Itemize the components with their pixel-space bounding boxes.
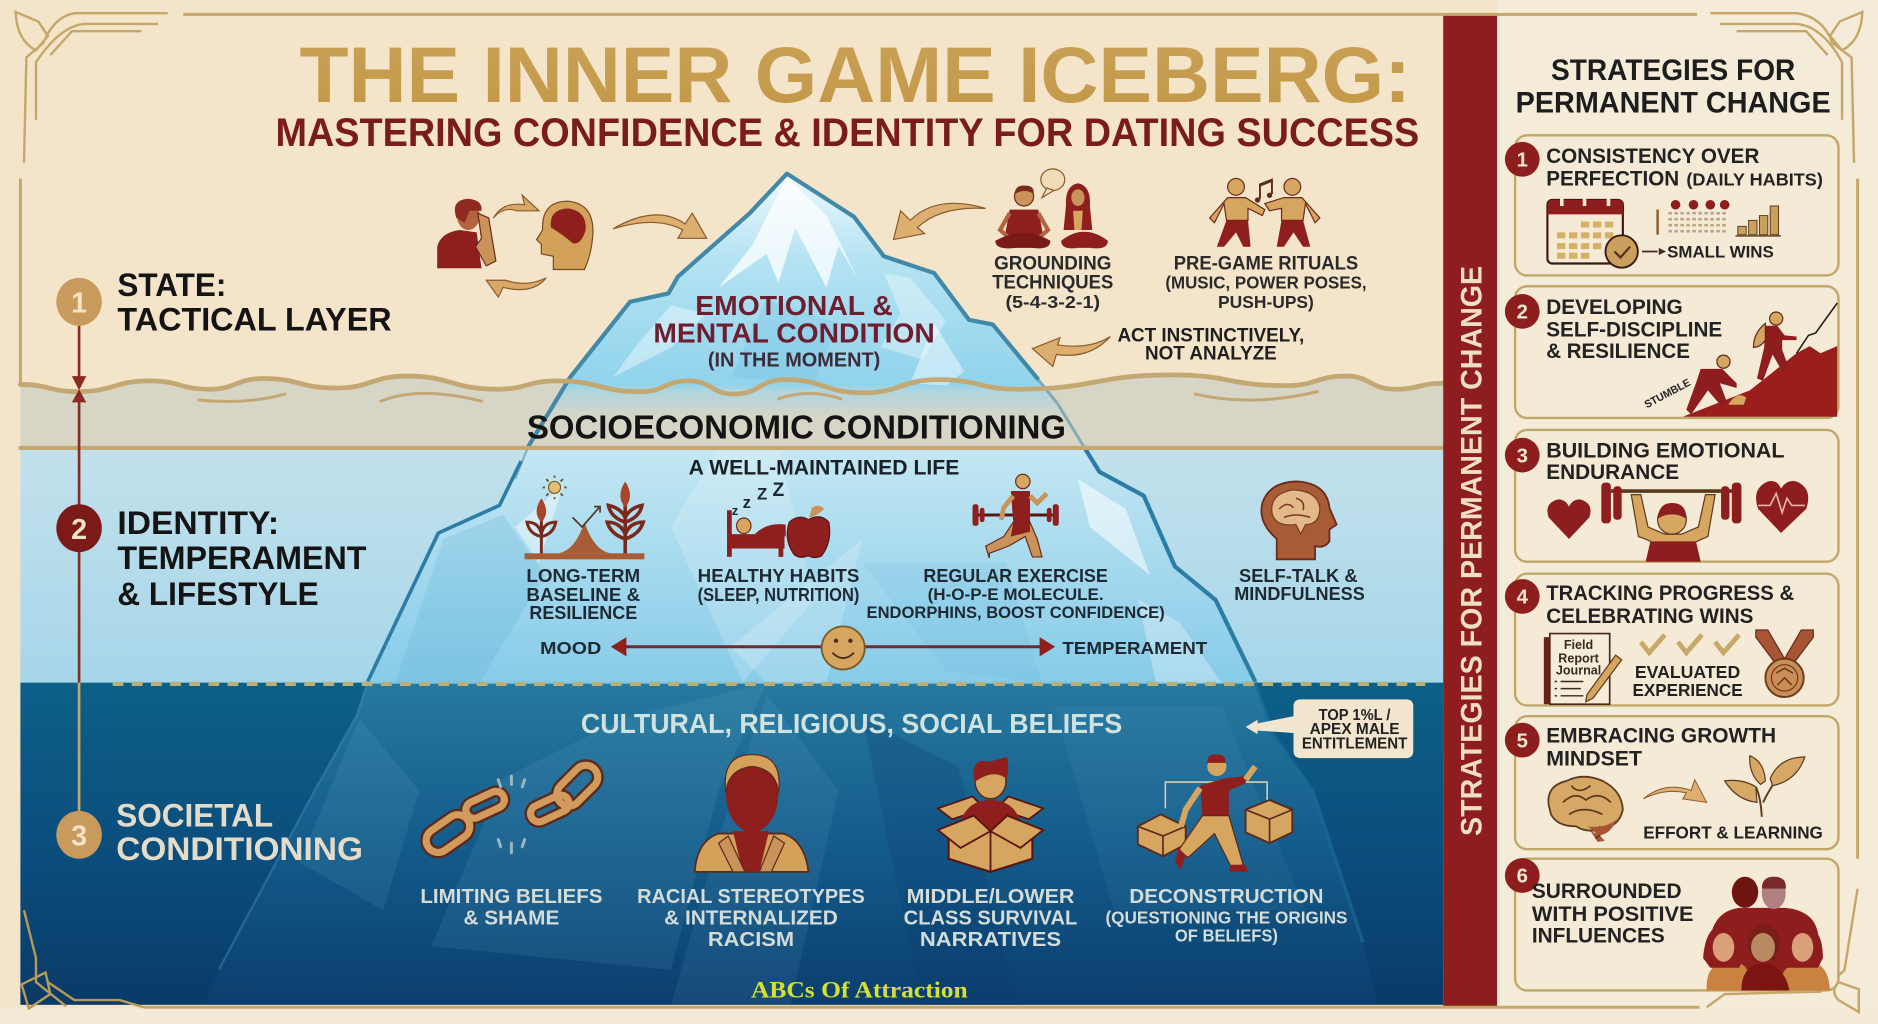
panel: card 1 consistency: [1505, 135, 1838, 275]
heading: socioeconomic conditioning: SOCIOECONOMIC CONDITIONING: [527, 409, 1066, 446]
act instinctively label: [1117, 325, 1304, 364]
mood-temperament spectrum: TEMPERAMENT: [1062, 638, 1207, 658]
arrow: loop to iceberg: [613, 213, 707, 238]
panel: card 3 emotional endurance: [1505, 430, 1838, 562]
layer 1: state: [56, 267, 392, 338]
healthy habits label: HEALTHY HABITS: [698, 565, 859, 586]
layer 3: societal conditioning: SOCIETAL: [116, 797, 273, 833]
panel: card 4 tracking progress: [1505, 574, 1838, 705]
arrow: grounding to iceberg: [893, 203, 986, 240]
layer 1: state: TACTICAL LAYER: [117, 302, 392, 338]
panel: card 4 tracking progress: 4: [1517, 587, 1529, 609]
icon: long-term baseline: [525, 475, 644, 559]
panel: card 1 consistency: SMALL WINS: [1667, 242, 1774, 261]
regular exercise label: ENDORPHINS, BOOST CONFIDENCE): [867, 603, 1165, 622]
panel: card 3 emotional endurance: BUILDING EMOTIONAL: [1546, 438, 1785, 463]
strategies side bar: [1443, 16, 1497, 1006]
icon: field report journal: Report: [1558, 651, 1600, 665]
panel: card 5 growth mindset: MINDSET: [1546, 745, 1642, 770]
racial stereotypes label: RACISM: [708, 929, 794, 951]
panel: card 2 self-discipline: [1505, 286, 1838, 418]
icon: racial stereotypes: [695, 755, 808, 872]
strategies side bar: STRATEGIES FOR PERMANENT CHANGE: [1456, 266, 1489, 836]
layer 2: identity: 2: [71, 514, 87, 546]
icon: grounding techniques: [995, 169, 1108, 248]
icon: climbers on mountain: STUMBLE: [1643, 377, 1693, 411]
heading: strategies: [1516, 54, 1831, 120]
pre-game label: PUSH-UPS): [1218, 292, 1314, 312]
limiting beliefs label: LIMITING BELIEFS: [420, 886, 602, 908]
middle/lower class label: CLASS SURVIVAL: [904, 908, 1077, 930]
callout: apex male entitlement: ENTITLEMENT: [1302, 736, 1408, 753]
icon: medal: [1756, 630, 1813, 697]
icon: calendar: [1547, 195, 1638, 268]
iceberg: [204, 168, 1401, 1005]
long-term label: LONG-TERM: [526, 565, 640, 586]
icon: self-talk head: [1261, 481, 1337, 559]
layer 3: societal conditioning: CONDITIONING: [116, 831, 363, 867]
regular exercise label: REGULAR EXERCISE: [923, 565, 1108, 586]
icon: pre-game rituals: [1210, 178, 1320, 247]
layer axis line: [72, 326, 86, 814]
icon: climbers on mountain: [1643, 303, 1837, 417]
grounding label: [992, 253, 1113, 312]
pre-game label: [1165, 253, 1367, 312]
deconstruction label: DECONSTRUCTION: [1129, 886, 1323, 908]
act instinctively label: ACT INSTINCTIVELY,: [1117, 325, 1304, 346]
act instinctively label: NOT ANALYZE: [1145, 343, 1277, 364]
mood-temperament spectrum: [540, 626, 1207, 669]
panel: card 2 self-discipline: 2: [1517, 302, 1528, 324]
title: MASTERING CONFIDENCE & IDENTITY FOR DATING SUCCESS: [275, 111, 1419, 155]
healthy habits label: (SLEEP, NUTRITION): [698, 584, 859, 605]
racial stereotypes label: RACIAL STEREOTYPES: [637, 886, 865, 908]
icon: healthy habits: [729, 480, 830, 558]
racial stereotypes label: [637, 886, 865, 951]
heading: strategies: STRATEGIES FOR: [1551, 54, 1795, 87]
iceberg tip text: [653, 290, 935, 371]
iceberg tip text: MENTAL CONDITION: [653, 318, 935, 349]
heading: cultural beliefs: CULTURAL, RELIGIOUS, SOCIAL BELIEFS: [581, 708, 1122, 739]
icon: healthy habits: Z: [757, 484, 767, 503]
mood-temperament spectrum: MOOD: [540, 638, 601, 658]
panel: card 4 tracking progress: EVALUATED: [1635, 662, 1740, 682]
icon: group of people: [1703, 877, 1830, 990]
panel: card 6 positive influences: INFLUENCES: [1532, 923, 1665, 948]
icon: weightlifter: [1601, 483, 1741, 562]
panel: water layers: [20, 375, 1443, 1005]
layer 2: identity: TEMPERAMENT: [117, 540, 367, 576]
panel: card 1 consistency: PERFECTION: [1546, 166, 1679, 191]
panel: card 2 self-discipline: DEVELOPING: [1546, 294, 1683, 319]
panel: card 4 tracking progress: CELEBRATING WINS: [1546, 603, 1753, 628]
snow facets: [719, 177, 858, 287]
icon: deconstruction: [1138, 754, 1292, 872]
panel: card 5 growth mindset: EFFORT & LEARNING: [1643, 822, 1823, 842]
middle/lower class label: [904, 886, 1077, 951]
iceberg tip text: (IN THE MOMENT): [708, 349, 880, 371]
panel: card 5 growth mindset: EMBRACING GROWTH: [1546, 723, 1776, 748]
layer 1: state: STATE:: [117, 267, 226, 303]
icon: healthy habits: Z: [773, 480, 785, 501]
deep facets: [431, 683, 767, 970]
icon: regular exercise: [973, 474, 1059, 558]
healthy habits label: [698, 565, 859, 605]
layer 1: state: 1: [71, 288, 87, 320]
self-talk label: [1234, 565, 1365, 604]
layer 2: identity: [56, 504, 367, 612]
long-term label: [526, 565, 640, 623]
iceberg tip text: EMOTIONAL &: [695, 290, 893, 321]
mid facets: [671, 448, 814, 683]
icon: person in box: [938, 757, 1043, 872]
middle/lower class label: NARRATIVES: [920, 929, 1061, 951]
icon: healthy habits: z: [732, 503, 739, 518]
panel: card 5 growth mindset: 5: [1517, 730, 1528, 752]
regular exercise label: (H-O-P-E MOLECULE.: [928, 585, 1104, 604]
panel: card 3 emotional endurance: ENDURANCE: [1546, 459, 1679, 484]
icon: brain: [1548, 777, 1623, 842]
panel: card 6 positive influences: WITH POSITIVE: [1532, 901, 1694, 926]
pre-game label: PRE-GAME RITUALS: [1174, 253, 1358, 274]
icon: field report journal: Journal: [1556, 663, 1601, 677]
layer 2: identity: IDENTITY:: [117, 505, 279, 541]
icon: broken chain: [421, 760, 603, 857]
icon: healthy habits: z: [743, 493, 751, 512]
grounding label: GROUNDING: [994, 253, 1111, 274]
layer 3: societal conditioning: 3: [71, 821, 87, 853]
deconstruction label: OF BELIEFS): [1175, 925, 1278, 945]
long-term label: BASELINE &: [526, 584, 640, 605]
watermark: ABCs Of Attraction: [751, 978, 968, 1003]
icon: self-awareness loop: [437, 195, 593, 297]
deconstruction label: [1105, 886, 1347, 945]
arrow: act instinctively to iceberg: [1032, 337, 1110, 366]
panel: card 6 positive influences: SURROUNDED: [1532, 878, 1682, 903]
racial stereotypes label: & INTERNALIZED: [664, 908, 838, 930]
panel: card 1 consistency: (DAILY HABITS): [1686, 170, 1823, 190]
limiting beliefs label: [420, 886, 602, 930]
title: THE INNER GAME ICEBERG:: [299, 30, 1411, 119]
heading: strategies: PERMANENT CHANGE: [1516, 87, 1831, 120]
layer 3: societal conditioning: [56, 797, 363, 867]
callout: apex male entitlement: [1246, 699, 1413, 758]
long-term label: RESILIENCE: [529, 602, 637, 623]
panel: card 4 tracking progress: EXPERIENCE: [1632, 680, 1743, 700]
callout: apex male entitlement: APEX MALE: [1310, 721, 1400, 738]
middle/lower class label: MIDDLE/LOWER: [907, 886, 1075, 908]
regular exercise label: [867, 565, 1165, 622]
icon: progress grid and chart: [1642, 200, 1781, 255]
subheading: well-maintained life: A WELL-MAINTAINED LIFE: [689, 454, 959, 479]
layer 2: identity: & LIFESTYLE: [117, 576, 319, 612]
icon: small heart: [1547, 499, 1591, 539]
title: [275, 30, 1419, 155]
icon: sprout: [1725, 756, 1805, 817]
water surface line: [20, 375, 1443, 684]
pre-game label: (MUSIC, POWER POSES,: [1165, 273, 1367, 293]
self-talk label: MINDFULNESS: [1234, 583, 1365, 604]
panel: card 5 growth mindset: [1505, 716, 1838, 849]
panel: card 1 consistency: CONSISTENCY OVER: [1546, 143, 1760, 168]
panel: card 2 self-discipline: & RESILIENCE: [1546, 338, 1690, 363]
icon: field report journal: [1544, 634, 1622, 704]
panel: card 4 tracking progress: TRACKING PROGRESS &: [1546, 580, 1794, 605]
arrow: growth: [1643, 780, 1707, 802]
grounding label: (5-4-3-2-1): [1005, 292, 1100, 312]
self-talk label: SELF-TALK &: [1239, 565, 1358, 586]
grounding label: TECHNIQUES: [992, 273, 1113, 294]
panel: card 2 self-discipline: SELF-DISCIPLINE: [1546, 317, 1722, 342]
panel: card 1 consistency: 1: [1517, 149, 1528, 171]
deconstruction label: (QUESTIONING THE ORIGINS: [1105, 907, 1347, 927]
panel: card 6 positive influences: [1505, 858, 1838, 990]
limiting beliefs label: & SHAME: [464, 908, 559, 930]
icon: heart with pulse: [1756, 481, 1808, 533]
panel: card 3 emotional endurance: 3: [1517, 445, 1528, 467]
panel: card 6 positive influences: 6: [1517, 866, 1528, 888]
callout: apex male entitlement: TOP 1%L /: [1319, 707, 1391, 724]
icon: field report journal: Field: [1564, 638, 1593, 652]
